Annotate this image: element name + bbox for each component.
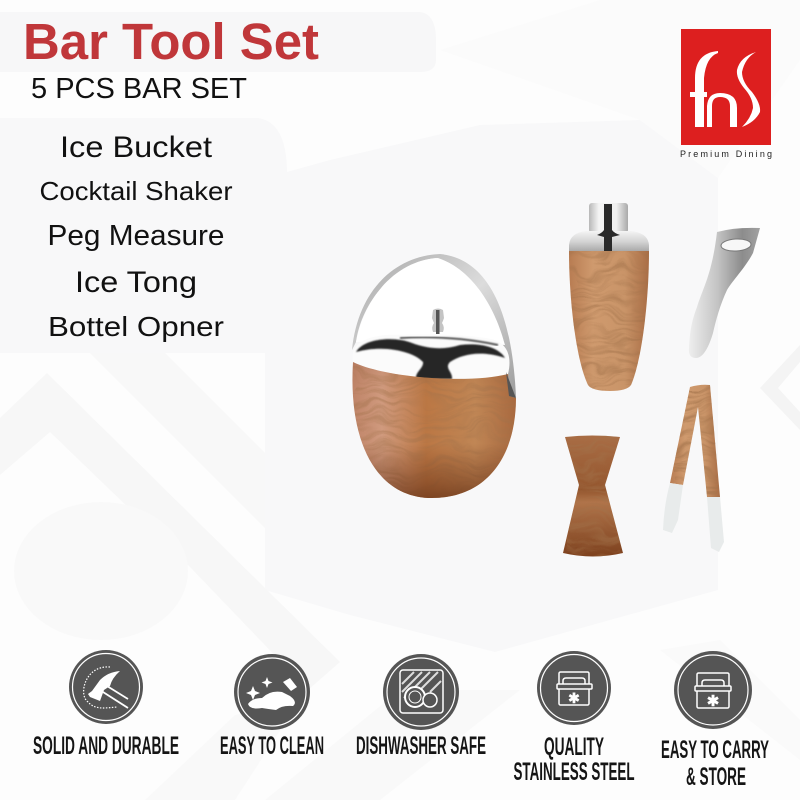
- bucket knob: [432, 308, 444, 334]
- list of set contents: Cocktail Shaker: [40, 176, 233, 206]
- feature: solid and durable: [33, 650, 179, 760]
- product: ice bucket: [352, 254, 516, 498]
- product: ice tong: [663, 385, 724, 552]
- feature: quality stainless steel: [514, 651, 634, 786]
- feature: dishwasher safe: [356, 654, 486, 760]
- feature: quality stainless steel: QUALITY: [544, 733, 604, 761]
- icon: carry box: ✱: [707, 693, 720, 710]
- list of set contents: [40, 131, 233, 342]
- feature: easy to clean: [220, 654, 324, 760]
- icon: dishes: [383, 654, 459, 730]
- icon: cooler box: ✱: [568, 690, 580, 706]
- feature: easy to clean: EASY TO CLEAN: [220, 732, 324, 760]
- title: Bar Tool Set: [23, 13, 319, 70]
- bucket lid: [353, 335, 509, 378]
- product: bottle opener: [689, 228, 760, 358]
- feature: dishwasher safe: DISHWASHER SAFE: [356, 732, 486, 760]
- list of set contents: Ice Tong: [75, 266, 197, 299]
- icon: spill: [234, 654, 310, 730]
- feature: easy to carry and store: [661, 651, 769, 791]
- product: cocktail shaker: [569, 203, 649, 391]
- icon: hammer: [69, 650, 143, 724]
- feature: solid and durable: SOLID AND DURABLE: [33, 732, 179, 760]
- subtitle: 5 PCS BAR SET: [31, 73, 247, 105]
- list of set contents: Peg Measure: [48, 220, 224, 252]
- list of set contents: Bottel Opner: [48, 311, 224, 342]
- list of set contents: Ice Bucket: [60, 131, 213, 164]
- product: peg measure: [563, 436, 623, 556]
- bucket body: [352, 362, 516, 498]
- feature: quality stainless steel: STAINLESS STEEL: [514, 758, 634, 786]
- logo: FnS Premium Dining: Premium Dining: [680, 149, 772, 159]
- feature: easy to carry and store: & STORE: [686, 763, 746, 791]
- logo: FnS Premium Dining: [680, 29, 772, 159]
- bucket handle: [352, 254, 516, 398]
